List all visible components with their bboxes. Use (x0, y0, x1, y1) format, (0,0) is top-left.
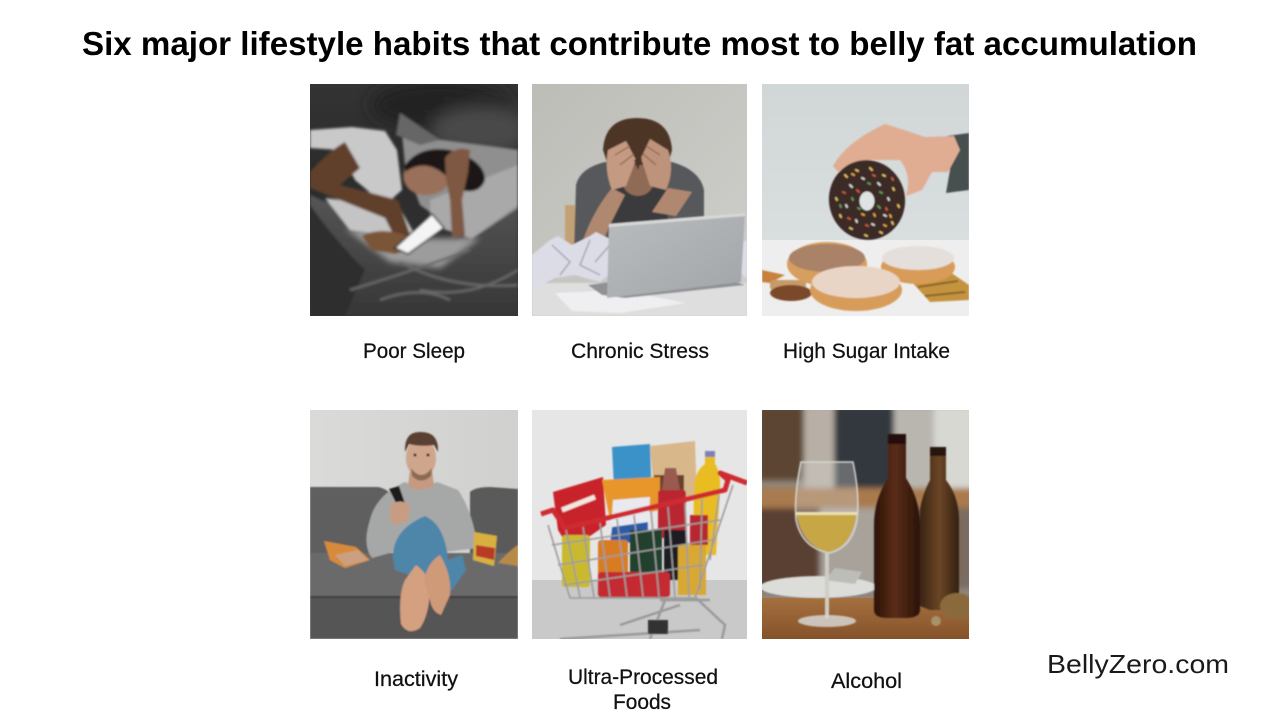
chocolate donut (828, 159, 906, 241)
cart undercarriage (560, 597, 725, 639)
crumpled paper (532, 231, 610, 284)
photo: man on sofa with remote (310, 410, 518, 639)
blanket (310, 194, 518, 300)
shirt (310, 127, 402, 205)
photo: stressed person at laptop (532, 84, 747, 316)
white box (610, 497, 650, 545)
first bottle (874, 435, 920, 618)
jeans (393, 516, 466, 600)
pillow (400, 136, 518, 240)
white sheet under arm (325, 198, 415, 235)
back left donut (787, 242, 867, 286)
chair (565, 205, 575, 255)
forearms (583, 188, 626, 240)
label: ultra-processed foods: Foods (613, 691, 671, 714)
label: poor sleep: Poor Sleep (363, 340, 465, 363)
hand (833, 124, 960, 196)
pastries (762, 270, 785, 283)
bottom goods (562, 535, 590, 587)
blue bag (612, 444, 652, 508)
chips right (473, 532, 497, 566)
snack right (498, 545, 518, 566)
panel: chronic stress (532, 84, 747, 363)
hair (603, 118, 672, 165)
snack (940, 593, 974, 619)
hands (607, 141, 636, 190)
arm (310, 142, 412, 240)
panel: ultra-processed foods (532, 410, 747, 714)
panel: alcohol (758, 406, 974, 693)
label: chronic stress: Chronic Stress (571, 340, 709, 363)
neck and head (408, 470, 434, 490)
wine glass bowl (796, 462, 858, 553)
orange bag (602, 477, 660, 520)
label: high sugar intake: High Sugar Intake (783, 340, 950, 363)
panel: poor sleep (310, 80, 530, 363)
photo: hand holding donut above pastries (762, 84, 969, 316)
sweater (366, 482, 478, 558)
wine (796, 512, 857, 552)
torso (574, 162, 704, 255)
cart wire (548, 485, 733, 598)
label: inactivity: Inactivity (374, 668, 459, 691)
website credit: BellyZero.com (1047, 649, 1229, 679)
second bottle (920, 448, 959, 610)
chips left (324, 541, 370, 568)
title: Six major lifestyle habits that contribute most to belly fat accumulation (82, 25, 1197, 62)
label: ultra-processed foods: Ultra-Processed (568, 666, 718, 689)
red bag (553, 477, 606, 550)
remote and hand (388, 486, 406, 503)
label: ultra-processed foods (568, 666, 718, 714)
plate (760, 576, 876, 598)
yellow bottle (693, 452, 720, 555)
cream bag (650, 441, 697, 505)
papers (555, 290, 686, 313)
raised forearm and hand (445, 149, 470, 238)
sleeve (946, 133, 969, 193)
panel: inactivity (310, 410, 518, 691)
soda can (658, 490, 686, 538)
glass stem (825, 552, 829, 618)
face (622, 164, 654, 196)
label: alcohol: Alcohol (831, 670, 902, 693)
sprinkles (836, 168, 899, 236)
back right donut (880, 260, 956, 285)
cart basket rim (541, 473, 747, 528)
table (532, 283, 747, 316)
panel: high sugar intake (762, 84, 969, 363)
laptop base (588, 282, 744, 299)
head (402, 164, 448, 196)
laptop lid (607, 213, 745, 298)
phone (395, 214, 444, 254)
front donut (809, 283, 903, 312)
hand holding phone (362, 231, 408, 254)
photo: shopping cart of snacks (532, 410, 747, 639)
feet (400, 565, 430, 631)
photo: person in bed looking at phone (310, 80, 530, 316)
sofa (310, 487, 392, 560)
photo: wine glass and beer bottles (758, 406, 974, 639)
